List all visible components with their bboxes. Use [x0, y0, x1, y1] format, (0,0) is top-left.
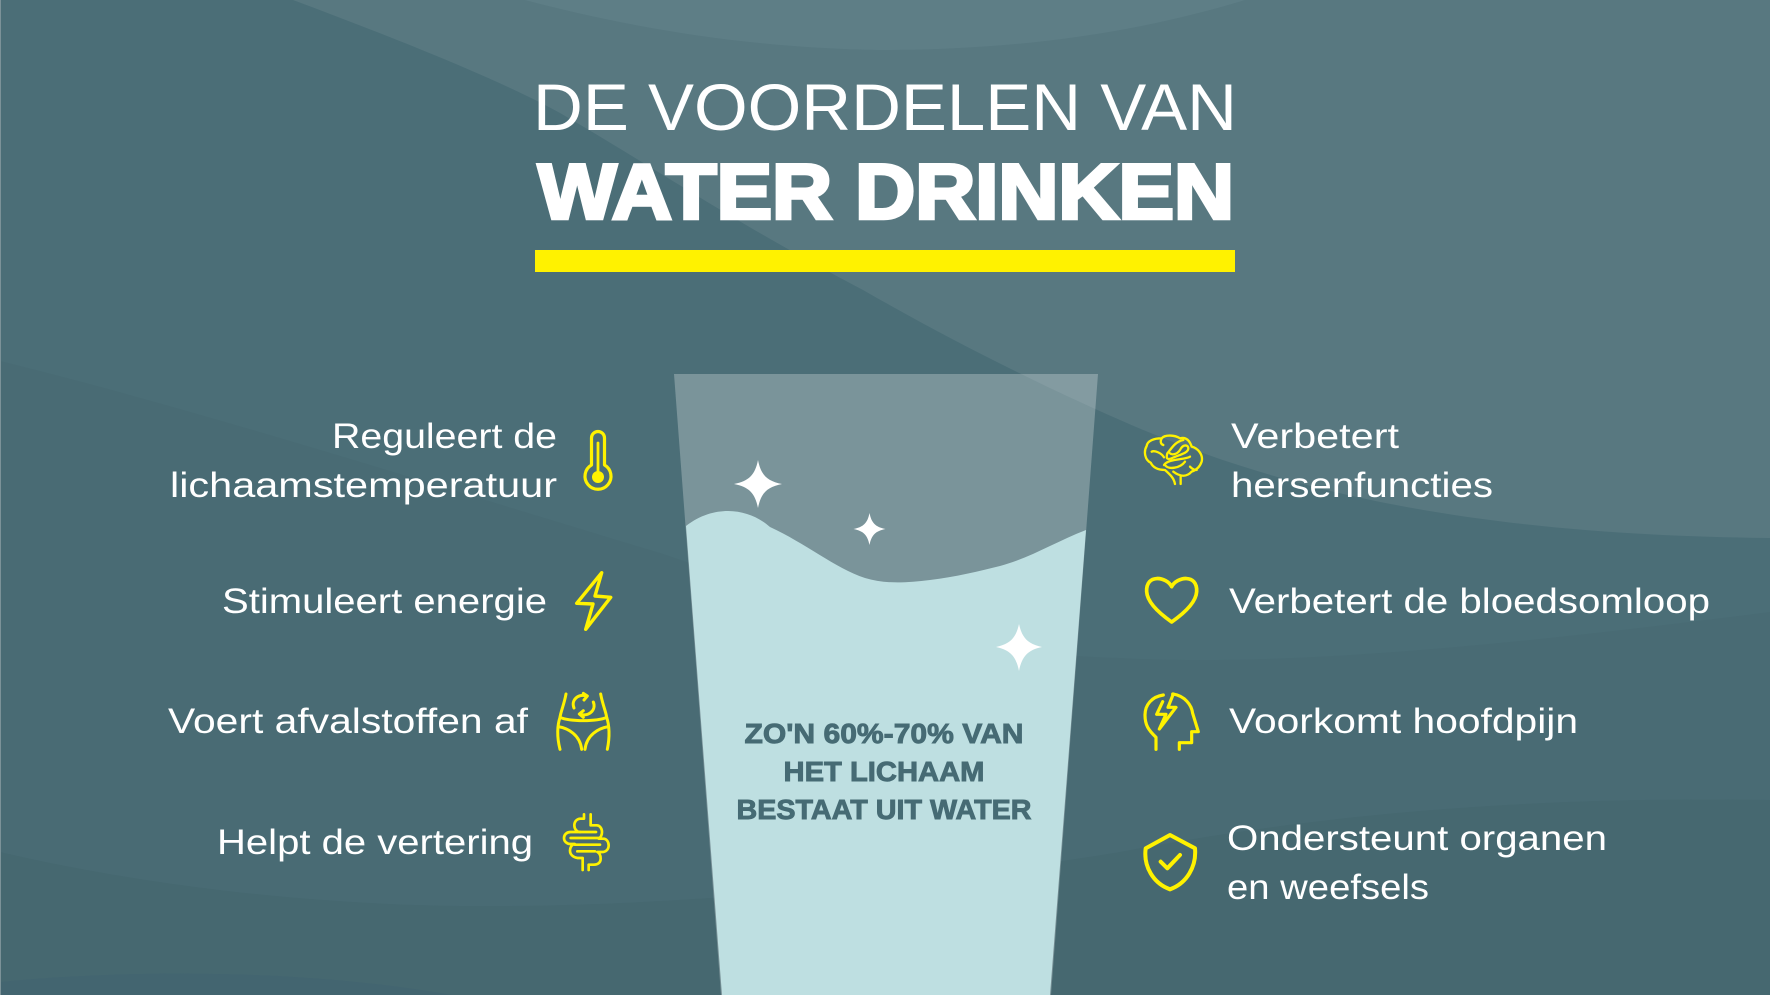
- benefit: organs: en weefsels: [1227, 868, 1429, 907]
- benefit: organs: Ondersteunt organen: [1227, 819, 1607, 858]
- benefit: temperature: Reguleert de: [332, 417, 557, 456]
- sparkle 1: [734, 460, 782, 508]
- benefit: energy: Stimuleert energie: [222, 582, 547, 621]
- benefit: waste: Voert afvalstoffen af: [168, 702, 528, 741]
- icon: intestine: [564, 814, 609, 870]
- title line 1: DE VOORDELEN VAN: [533, 70, 1237, 144]
- benefit: energy: [222, 573, 611, 629]
- benefit: digestion: [217, 814, 609, 870]
- icon: lightning bolt: [577, 573, 611, 629]
- title: [533, 70, 1237, 236]
- glass of water: [674, 374, 1098, 995]
- benefit: circulation: [1147, 579, 1710, 622]
- benefit: headache: Voorkomt hoofdpijn: [1229, 702, 1578, 741]
- glass body: [674, 374, 1098, 995]
- benefit: headache: [1145, 694, 1578, 749]
- glass text: [736, 718, 1032, 825]
- icon: heart: [1147, 579, 1197, 622]
- benefit: brain: Verbetert: [1231, 417, 1399, 456]
- benefit: circulation: Verbetert de bloedsomloop: [1229, 582, 1710, 621]
- icon: brain: [1145, 436, 1202, 484]
- icon: belly: [558, 693, 609, 749]
- icon: head with bolt: [1145, 694, 1198, 749]
- benefit: temperature: [170, 417, 611, 505]
- glass text: ZO'N 60%-70% VAN: [744, 718, 1024, 749]
- benefit: brain: hersenfuncties: [1231, 466, 1493, 505]
- benefit: waste: [168, 693, 609, 749]
- glass text: BESTAAT UIT WATER: [736, 794, 1032, 825]
- title line 2: WATER DRINKEN: [538, 148, 1234, 236]
- sparkle 3: [996, 624, 1042, 671]
- glass text: HET LICHAAM: [784, 756, 984, 787]
- icon: thermometer: [585, 432, 611, 489]
- benefit: temperature: lichaamstemperatuur: [170, 466, 557, 505]
- icon: shield: [1145, 835, 1195, 889]
- sparkle 2: [854, 513, 886, 545]
- benefit: organs: [1145, 819, 1607, 907]
- water: [686, 511, 1086, 995]
- benefit: brain: [1145, 417, 1493, 505]
- title underline: [535, 250, 1235, 272]
- benefit: digestion: Helpt de vertering: [217, 823, 533, 862]
